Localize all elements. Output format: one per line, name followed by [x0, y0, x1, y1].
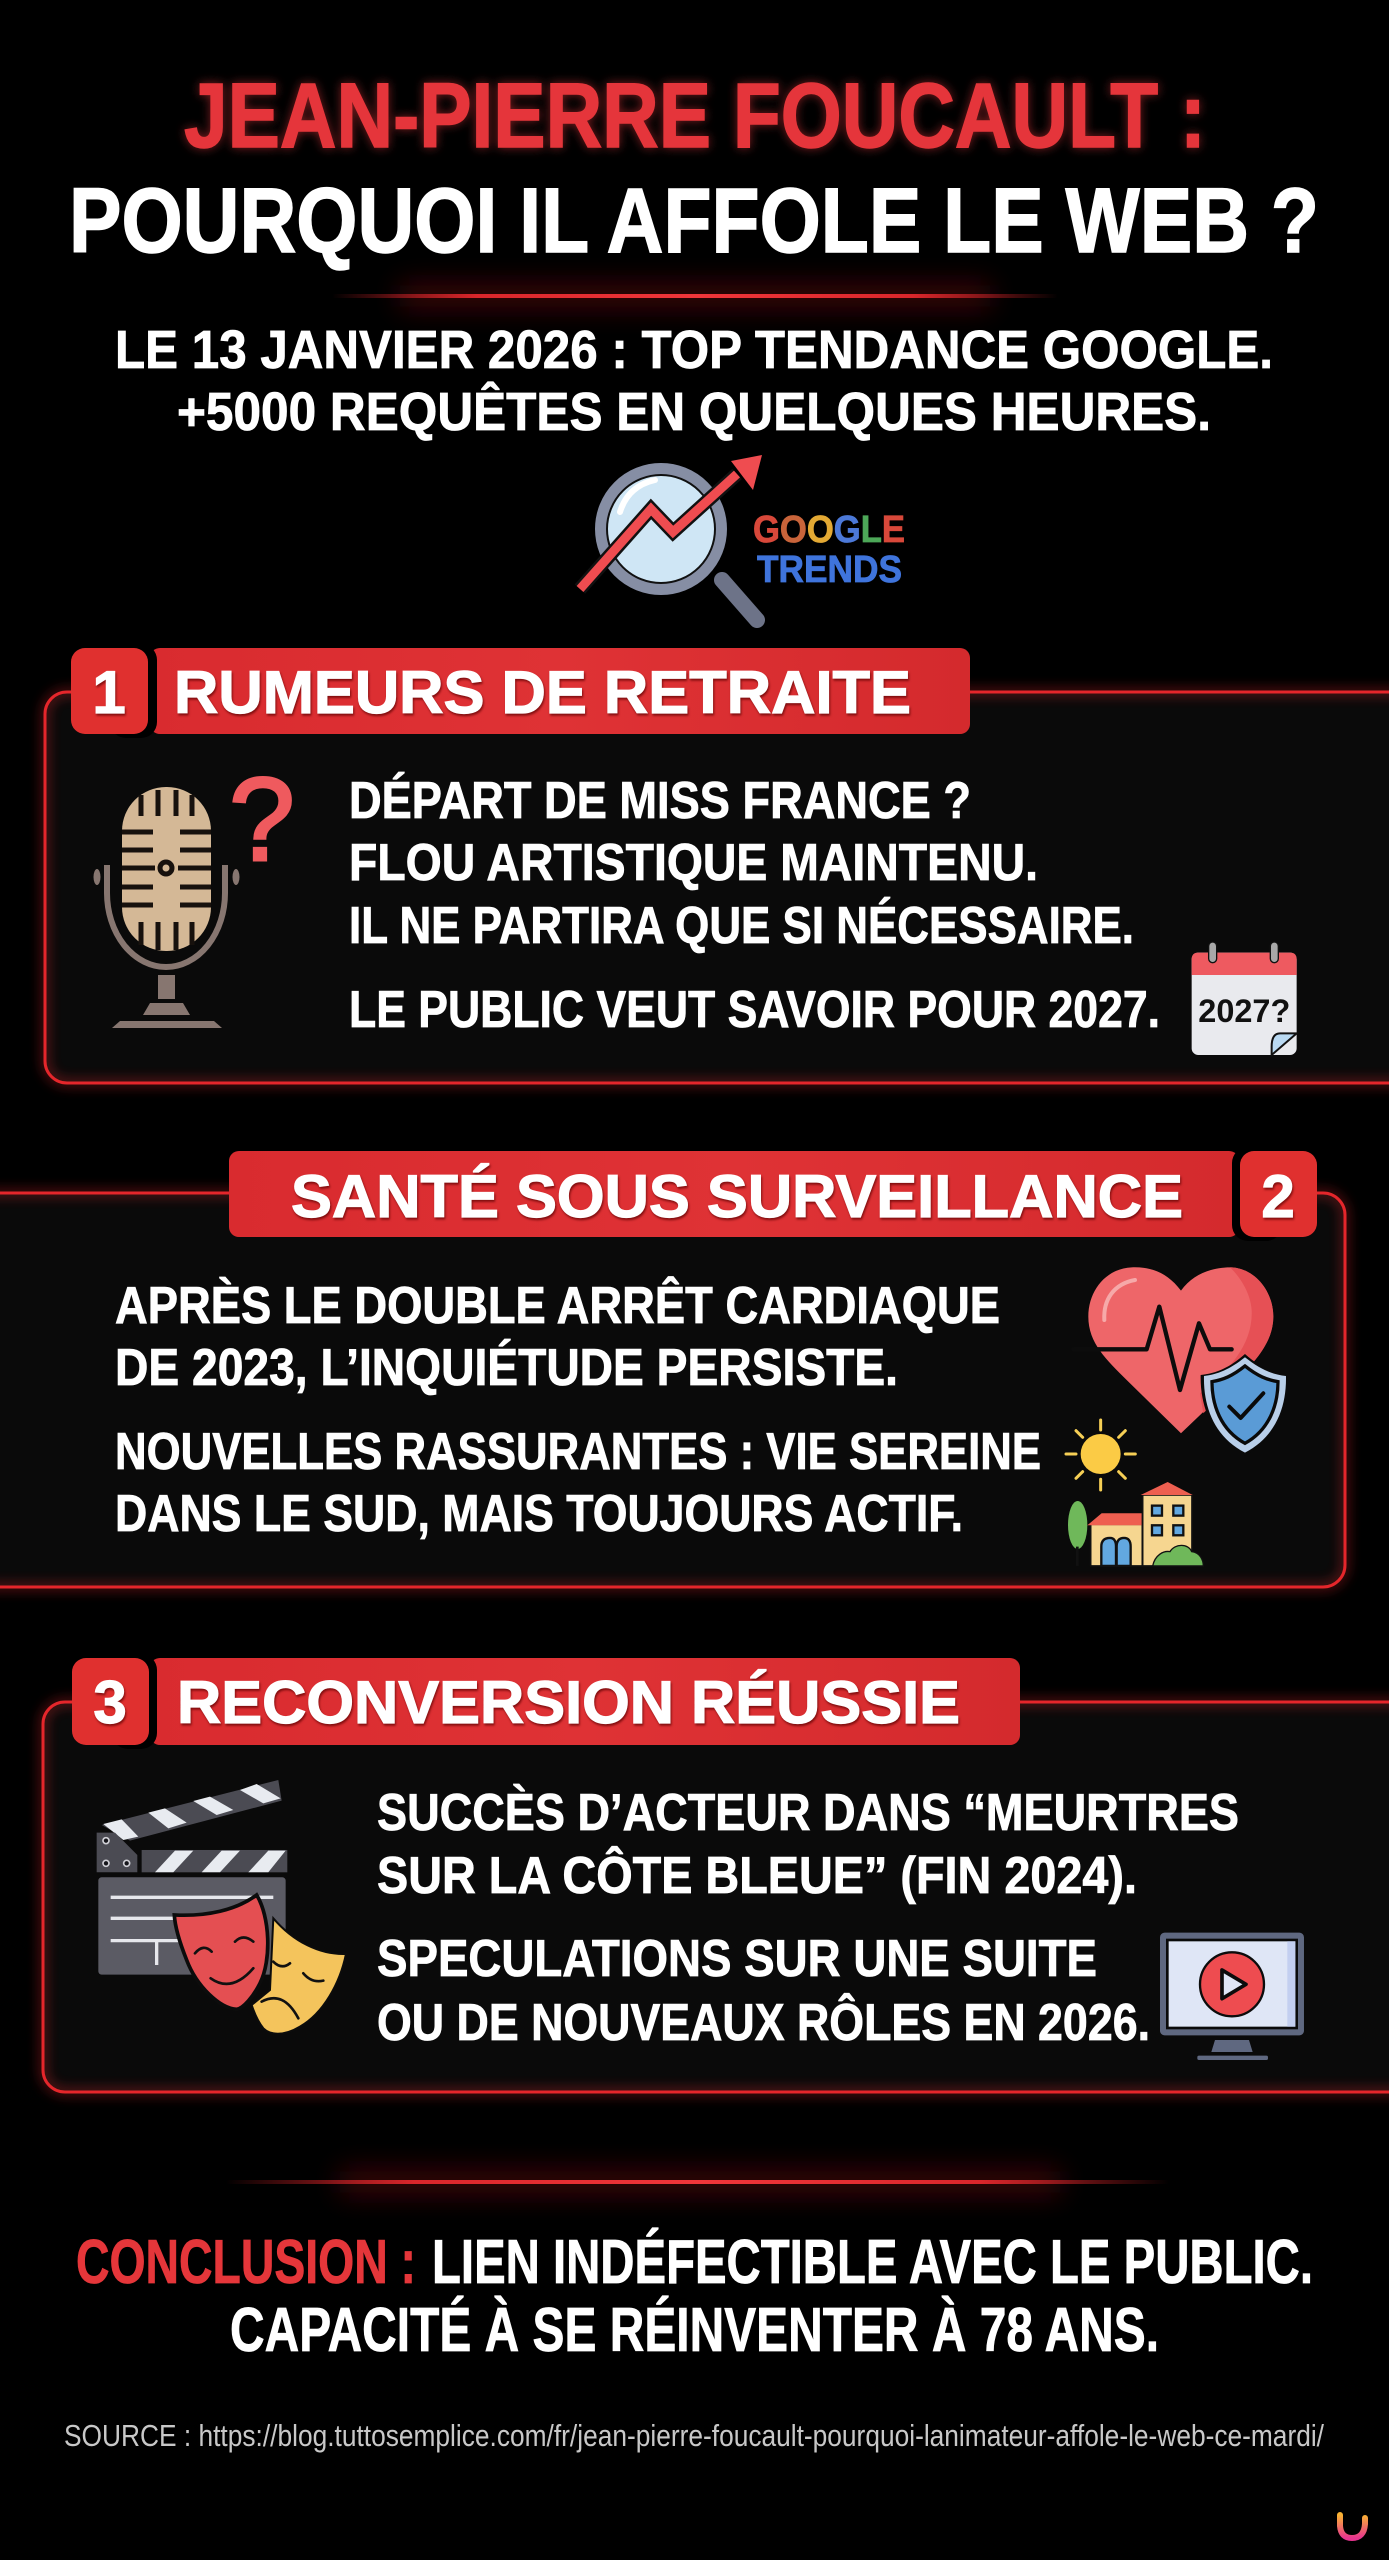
- panel 1 heading: 1: [92, 659, 126, 726]
- panel 3 heading: RECONVERSION RÉUSSIE: [177, 1669, 960, 1736]
- panel 2 heading: SANTÉ SOUS SURVEILLANCE: [291, 1163, 1183, 1230]
- top divider: [332, 284, 1058, 308]
- conclusion: CONCLUSION :: [76, 2228, 416, 2297]
- icon: question mark: ?: [229, 754, 295, 886]
- panel: santé sous surveillance: [0, 1147, 1345, 1587]
- subtitle: +5000 REQUÊTES EN QUELQUES HEURES.: [177, 381, 1211, 442]
- icon: calendar 2027: 2027?: [1198, 993, 1290, 1029]
- panel 1 text: FLOU ARTISTIQUE MAINTENU.: [349, 834, 1038, 892]
- panel 1 text: IL NE PARTIRA QUE SI NÉCESSAIRE.: [349, 897, 1134, 955]
- icon: calendar 2027: [1192, 942, 1297, 1055]
- shield: [1201, 1354, 1289, 1456]
- bottom divider: [226, 2170, 1169, 2194]
- panel 1 heading: [71, 644, 970, 738]
- panel 1 heading: RUMEURS DE RETRAITE: [174, 659, 911, 726]
- panel 3 text: SUCCÈS D’ACTEUR DANS “MEURTRES: [377, 1784, 1239, 1842]
- title: [69, 65, 1319, 272]
- google wordmark: [753, 509, 905, 591]
- panel 3 frame: [43, 1702, 1389, 2092]
- subtitle: [115, 320, 1273, 442]
- panel: reconversion réussie: [43, 1654, 1389, 2092]
- title: JEAN-PIERRE FOUCAULT :: [184, 65, 1206, 167]
- google wordmark: TRENDS: [757, 549, 902, 591]
- panel 1 text: DÉPART DE MISS FRANCE ?: [349, 772, 971, 830]
- panel 2 text: [115, 1276, 1041, 1543]
- icon: sun and house: [1066, 1420, 1203, 1566]
- panel 1 text: LE PUBLIC VEUT SAVOIR POUR 2027.: [349, 981, 1160, 1039]
- icon: google trends magnifier: [580, 455, 905, 620]
- panel 3 text: SUR LA CÔTE BLEUE” (FIN 2024).: [377, 1846, 1137, 1905]
- panel: rumeurs de retraite: [45, 644, 1389, 1083]
- panel 2 text: APRÈS LE DOUBLE ARRÊT CARDIAQUE: [115, 1276, 1000, 1335]
- panel 3 text: [377, 1784, 1239, 2052]
- panel 2 heading: 2: [1261, 1163, 1295, 1230]
- panel 2 text: NOUVELLES RASSURANTES : VIE SEREINE: [115, 1423, 1041, 1481]
- panel 1 frame: [45, 692, 1389, 1083]
- panel 2 frame: [0, 1193, 1345, 1587]
- icon: clapperboard and theatre masks: [97, 1780, 346, 2034]
- panel 1 text: [349, 772, 1160, 1039]
- icon: monitor with play button: [1160, 1933, 1304, 2060]
- panel 2 text: DE 2023, L’INQUIÉTUDE PERSISTE.: [115, 1339, 898, 1397]
- conclusion: [76, 2228, 1313, 2365]
- panel 3 heading: [72, 1654, 1020, 1749]
- panel 2 text: DANS LE SUD, MAIS TOUJOURS ACTIF.: [115, 1485, 963, 1543]
- google wordmark: GOOGLE: [753, 509, 905, 551]
- mask: happy: [174, 1895, 268, 2009]
- panel 3 heading: 3: [93, 1669, 127, 1736]
- subtitle: LE 13 JANVIER 2026 : TOP TENDANCE GOOGLE.: [115, 320, 1273, 380]
- panel 3 text: SPECULATIONS SUR UNE SUITE: [377, 1930, 1097, 1988]
- icon: microphone: [94, 787, 240, 1028]
- icon: heart with pulse and shield: [1073, 1267, 1289, 1456]
- mask: sad: [252, 1918, 346, 2034]
- icon: watermark logo: [1340, 2514, 1365, 2538]
- panel 2 heading: [229, 1147, 1317, 1241]
- panel 3 text: OU DE NOUVEAUX RÔLES EN 2026.: [377, 1993, 1150, 2052]
